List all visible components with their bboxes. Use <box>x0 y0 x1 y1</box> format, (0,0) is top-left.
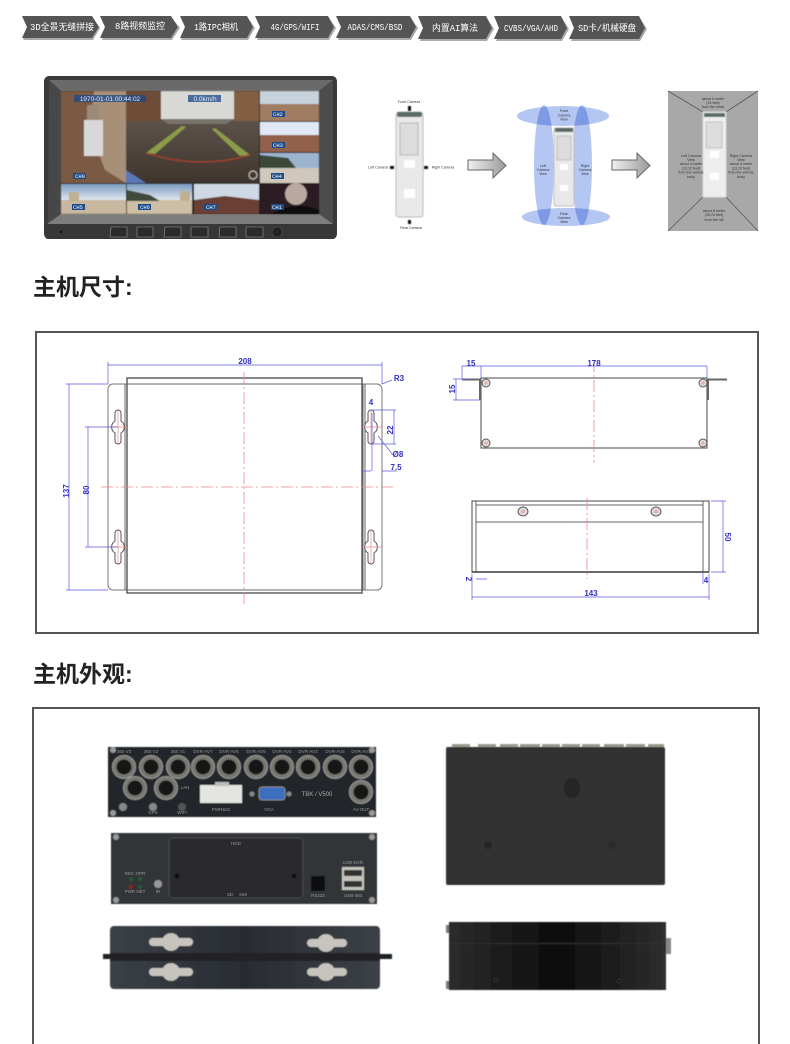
view: CH3 <box>260 122 319 152</box>
front panel port labels: DVR-AV4 <box>272 749 292 754</box>
diagram 2 labels: Front <box>560 109 568 113</box>
panel: appearance photos <box>33 708 759 1044</box>
rear panel labels: PWR NET <box>125 889 146 894</box>
rear panel labels: USB-360 <box>344 893 363 898</box>
photo: front panel with connectors <box>108 747 376 817</box>
front panel port labels <box>117 749 371 815</box>
photo: mounting plate <box>103 926 392 989</box>
diagram 3 labels: body <box>687 175 695 179</box>
heading: host appearance: 主机外观: <box>33 661 133 687</box>
diagram 2 labels: Camera <box>558 114 570 118</box>
diagram 1 labels: Right Camera <box>432 166 454 170</box>
diagram 1 labels: Rear Camera <box>400 226 422 230</box>
diagram 3 labels: Right Camera <box>730 154 752 158</box>
chevron: ADAS CMS BSD <box>336 16 418 40</box>
screen: multi-view video <box>61 91 319 214</box>
chevron: 3D panorama: 3D全景无缝拼接 <box>30 21 94 33</box>
front panel port labels: DVR-AV7 <box>193 749 213 754</box>
panel: dimension drawing <box>36 332 758 633</box>
rear panel labels <box>125 841 364 898</box>
diagram 2 labels: View <box>581 172 589 176</box>
diagram 2 labels: View <box>560 118 568 122</box>
drawing: front view <box>472 498 709 579</box>
rear panel labels: IR <box>156 889 161 894</box>
rear panel labels: REC OPR <box>125 871 146 876</box>
rear panel labels: USB-DVR <box>343 860 364 865</box>
dimensions: top plate: 22 <box>386 425 395 434</box>
camera layout diagram 1 <box>390 106 428 224</box>
diagram 3 labels: about 8 meter <box>703 209 726 213</box>
screen overlay text: CH6 <box>140 204 150 211</box>
front panel port labels: DVR-AV5 <box>246 749 266 754</box>
rear panel labels: RS232 <box>311 893 325 898</box>
diagram 3 labels: about 5 meter <box>702 97 725 101</box>
diagram 2 labels: View <box>560 220 568 224</box>
rear panel labels: SIM <box>239 892 247 897</box>
diagram 3 labels: Left Camera <box>681 154 701 158</box>
dimensions: side view: 15 <box>467 359 476 368</box>
view: surround top-down <box>61 91 126 183</box>
diagram 2 labels: Camera <box>537 168 549 172</box>
dimensions: top plate: Ø8 <box>393 450 404 459</box>
photo: side of enclosure <box>446 922 671 990</box>
photo: top of enclosure <box>446 744 665 885</box>
dimensions: side view <box>448 359 707 400</box>
screen overlay text: CH3 <box>273 142 283 149</box>
drawing: side view <box>462 360 727 463</box>
view: CH4 <box>260 153 319 183</box>
dimensions: front view: 143 <box>584 589 598 598</box>
diagram 1 labels <box>368 100 454 230</box>
front panel port labels: 360 V3 <box>117 749 132 754</box>
front panel port labels: WIFI <box>177 810 187 815</box>
diagram 3 labels: (13.12 feet) <box>682 166 700 170</box>
diagram 3 labels: (13.12 feet) <box>732 166 750 170</box>
dimensions: top plate: 137 <box>62 484 71 498</box>
diagram 2 labels: Camera <box>558 216 570 220</box>
chevron: 4G GPS WIFI <box>255 16 336 40</box>
diagram 3 labels: View <box>737 158 745 162</box>
front panel port labels: PWR&IO <box>212 807 231 812</box>
chevron: 8 channel <box>100 16 180 40</box>
dimensions: side view: 178 <box>587 359 601 368</box>
diagram 3 labels: from the rail <box>705 218 724 222</box>
diagram 1 labels: Front Camera <box>398 100 420 104</box>
screen overlay text: CH4 <box>272 173 283 180</box>
view: rear camera with guide lines <box>126 91 259 183</box>
front panel port labels: DVR-AV1 <box>351 749 371 754</box>
feature chevron strip <box>22 16 647 41</box>
front panel port labels: DVR-AV2 <box>325 749 345 754</box>
photo: rear panel <box>111 833 377 904</box>
dimensions: front view <box>464 501 732 600</box>
diagram 3 labels: (26.24 feet) <box>705 213 723 217</box>
diagram 2 labels: Left <box>540 164 546 168</box>
front panel port labels: DVR-AV6 <box>219 749 239 754</box>
drawing: top plate view <box>101 372 393 606</box>
view: CH1 driver <box>260 183 319 214</box>
dimensions: top plate: 7.5 <box>390 463 402 472</box>
dimensions: top plate: 208 <box>238 357 252 366</box>
chevron: built-in AI <box>418 16 494 41</box>
arrow 2 <box>612 153 650 178</box>
diagram 3 labels: about 4 meter <box>730 162 753 166</box>
screen overlay text: 0.0km/h <box>193 96 217 103</box>
monitor buttons <box>60 227 282 237</box>
view: CH5 <box>61 184 126 214</box>
front panel port labels: 360 V2 <box>144 749 159 754</box>
chevron: SD and HDD <box>569 16 647 41</box>
diagram 3 labels <box>678 97 754 222</box>
diagram 3 labels: from the head <box>702 105 724 109</box>
diagram 3 labels: View <box>687 158 695 162</box>
front panel port labels: 360 V1 <box>171 749 186 754</box>
chevron: CVBS VGA AHD <box>494 16 569 41</box>
arrow 1 <box>468 153 506 178</box>
dimensions: top plate: R3 <box>394 374 405 383</box>
chevron: 1 IPC <box>180 16 255 40</box>
front panel port labels: LAN <box>181 785 189 790</box>
dimensions: side view: 15 <box>448 384 457 393</box>
dimensions: top plate: 80 <box>82 485 91 494</box>
diagram 2 labels: View <box>539 172 547 176</box>
front panel port labels: GPS <box>148 810 158 815</box>
diagram 2 labels <box>537 109 591 224</box>
screen overlay text: CH7 <box>206 204 216 211</box>
diagram 3 labels: from the vehicle <box>728 170 754 174</box>
rear panel labels: SD <box>227 892 234 897</box>
diagram 2 labels: Right <box>581 164 589 168</box>
diagram 3 labels: about 4 meter <box>680 162 703 166</box>
stitched view diagram 3 <box>668 91 758 231</box>
monitor photo <box>44 76 337 239</box>
heading: host dimensions: 主机尺寸: <box>33 274 133 300</box>
chevron: built-in AI: 内置AI算法 <box>432 22 478 34</box>
front panel port labels: VGA <box>264 807 274 812</box>
diagram 2 labels: Camera <box>579 168 591 172</box>
front panel port labels: AV-OUT <box>353 807 369 812</box>
screen overlay text: CH0 <box>75 173 85 180</box>
rear panel labels: HDD <box>231 841 242 846</box>
diagram 1 labels: Left Camera <box>368 166 388 170</box>
diagram 3 labels: body <box>737 175 745 179</box>
chevron: SD and HDD: SD卡/机械硬盘 <box>578 22 636 34</box>
diagram 3 labels: (16 feet) <box>706 101 720 105</box>
chevron: 8 channel: 8路视频监控 <box>115 20 165 32</box>
camera coverage diagram 2 <box>517 105 610 226</box>
chevron: 3D panorama <box>22 16 100 40</box>
view: CH2 <box>260 91 319 121</box>
dimensions: front view: 50 <box>723 533 732 542</box>
front panel port labels: DVR-AV3 <box>298 749 318 754</box>
view: CH6 <box>127 184 192 214</box>
chevron: 1 IPC: 1路IPC相机 <box>194 21 238 33</box>
diagram 3 labels: from the vehicle <box>678 170 704 174</box>
dimensions: front view: 4 <box>704 576 709 585</box>
chevron: 4G GPS WIFI: 4G/GPS/WIFI <box>270 23 320 33</box>
screen overlay text <box>72 95 285 211</box>
screen overlay text: 1970-01-01 00:44:02 <box>80 96 141 103</box>
dimensions: top plate <box>62 357 405 590</box>
screen overlay text: CH5 <box>73 204 83 211</box>
screen overlay text: CH1 <box>272 204 283 211</box>
chevron: ADAS CMS BSD: ADAS/CMS/BSD <box>348 23 402 33</box>
chevron: CVBS VGA AHD: CVBS/VGA/AHD <box>504 24 558 34</box>
screen overlay text: CH2 <box>273 111 283 118</box>
diagram 2 labels: Rear <box>560 212 569 216</box>
dimensions: front view: 2 <box>464 577 473 582</box>
dimensions: top plate: 4 <box>369 398 374 407</box>
front panel port labels: TBK / V500 <box>302 792 333 798</box>
view: CH7 <box>194 184 259 214</box>
